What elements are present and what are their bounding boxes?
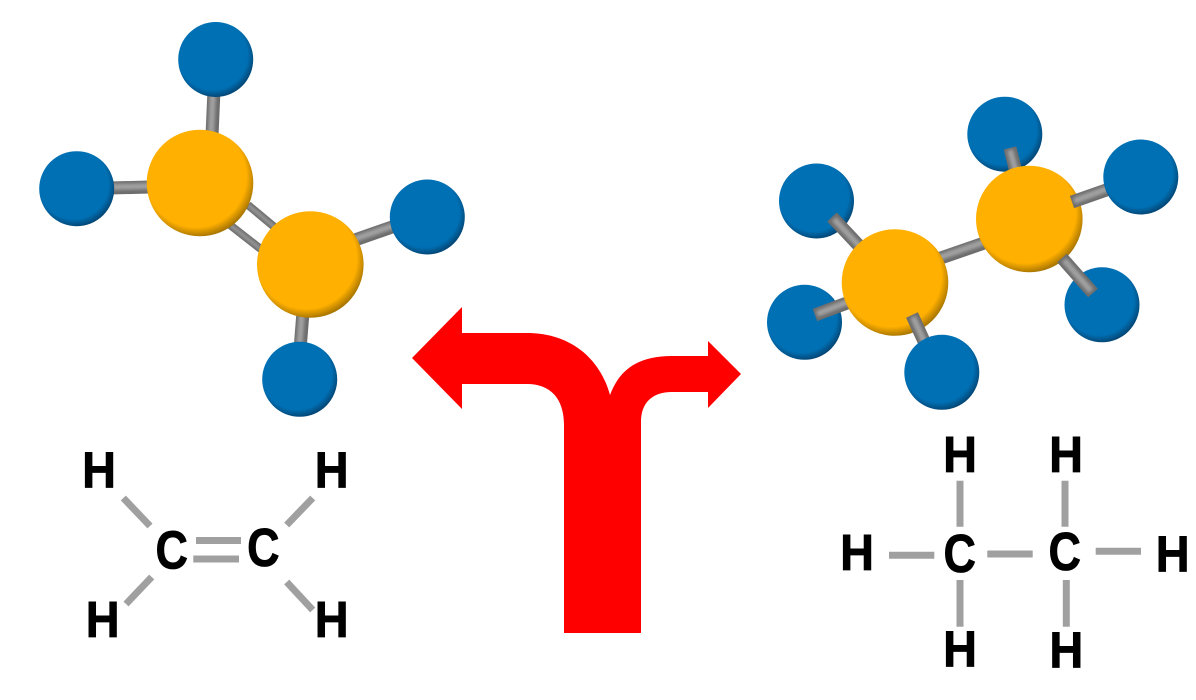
ethylene structural formula: H [315, 443, 349, 499]
ethane structural formula: H [943, 427, 977, 483]
ethylene structural formula: H [315, 592, 349, 648]
ethane structural formula: H [840, 525, 874, 581]
red forked arrow [412, 307, 741, 633]
ethane ball-and-stick model [767, 97, 1178, 410]
ethane structural formula: H [1049, 427, 1083, 483]
ethane structural formula: H [943, 622, 977, 678]
ethane structural formula: C [1048, 521, 1081, 582]
ethylene structural formula: C [247, 517, 280, 578]
ethylene structural formula [82, 443, 349, 648]
ethane structural formula: H [1156, 527, 1190, 583]
ethane structural formula: C [943, 523, 976, 584]
ethylene ball-and-stick model [39, 22, 465, 417]
ethylene structural formula: H [82, 443, 116, 499]
ethane structural formula [840, 427, 1190, 679]
ethane structural formula: H [1049, 623, 1083, 679]
ethylene structural formula: C [155, 520, 188, 580]
ethylene structural formula: H [86, 592, 120, 648]
